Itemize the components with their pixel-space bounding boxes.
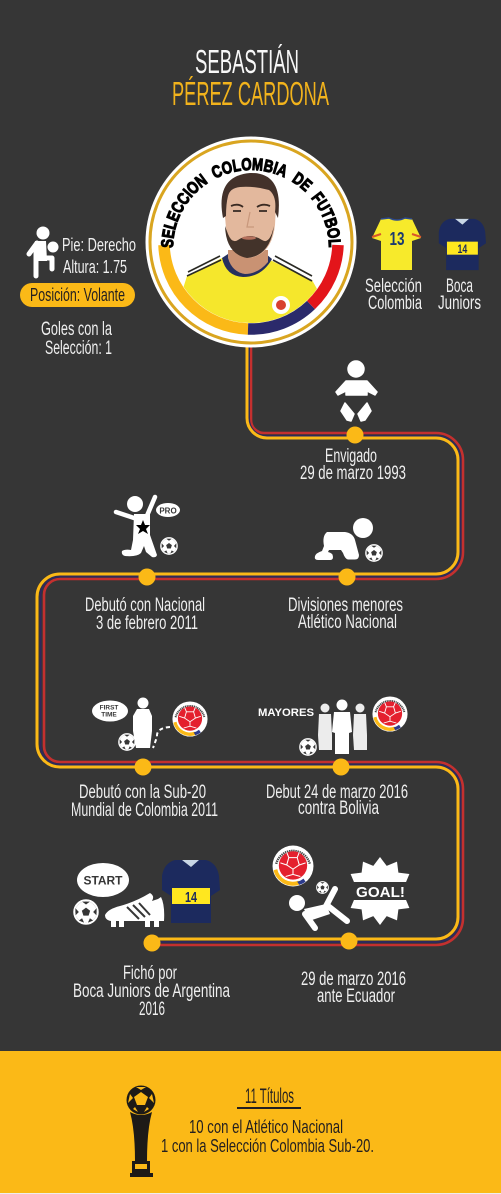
milestone: Sub-20 debut: Debutó con la Sub-20 [79, 782, 206, 803]
milestone: youth divisions [288, 518, 403, 633]
milestone: goal [273, 846, 420, 1007]
icon: bicycle kick goal [273, 846, 420, 928]
icon: baby [336, 361, 377, 421]
milestone: youth divisions: Divisiones menores [288, 595, 403, 616]
milestone: senior debut: Debut 24 de marzo 2016 [266, 782, 408, 803]
icon: mayores team [258, 696, 408, 755]
player stats: Goles con la [41, 319, 112, 340]
player stats [20, 226, 136, 359]
milestone: Boca transfer: Fichó por [123, 963, 177, 984]
title: PÉREZ CARDONA [172, 75, 329, 112]
milestone: senior debut [258, 696, 408, 819]
icon: first time [92, 698, 208, 750]
milestone: Nacional debut: 3 de febrero 2011 [96, 613, 198, 634]
icon: crawling baby [315, 518, 382, 561]
icon: Boca shirt [439, 219, 486, 270]
panel: titles: 11 Títulos [245, 1085, 294, 1108]
milestone: Nacional debut: Debutó con Nacional [85, 595, 205, 616]
milestone: Boca transfer: Boca Juniors de Argentina [73, 981, 230, 1002]
milestone: birth: 29 de marzo 1993 [300, 463, 406, 484]
milestone: Boca transfer: 2016 [139, 999, 165, 1020]
shirts [365, 218, 486, 314]
milestone: birth: Envigado [325, 446, 377, 467]
segmented ring [164, 245, 338, 329]
milestone: senior debut: contra Bolivia [298, 798, 379, 819]
icon: bicycle kick goal: GOAL! [356, 884, 405, 901]
curved heading: SELECCION COLOMBIA DE FUTBOL [160, 158, 341, 248]
milestone: goal: ante Ecuador [317, 986, 395, 1007]
shirts: Juniors [438, 293, 481, 314]
icon: pro player: PRO [159, 506, 177, 516]
panel: titles: 10 con el Atlético Nacional [189, 1117, 343, 1137]
milestone: Boca transfer [73, 860, 230, 1020]
milestone: goal: 29 de marzo 2016 [301, 969, 406, 990]
icon: Colombia shirt: 13 [390, 229, 404, 249]
title: SEBASTIÁN [195, 43, 299, 80]
shirts: Selección [365, 276, 422, 297]
icon: trophy [126, 1086, 156, 1177]
player stats: Selección: 1 [45, 338, 112, 359]
icon: first time: FIRST [100, 704, 118, 712]
portrait medallion [146, 136, 356, 348]
panel: titles [0, 1051, 501, 1194]
player stats: Altura: 1.75 [63, 257, 127, 277]
milestone: youth divisions: Atlético Nacional [298, 612, 397, 633]
milestone: Sub-20 debut: Mundial de Colombia 2011 [71, 800, 218, 821]
shirts: Colombia [368, 293, 422, 314]
timeline path [37, 345, 463, 945]
milestone: birth [300, 361, 406, 484]
icon: start boot and shirt: START [84, 876, 122, 888]
panel: titles: 1 con la Selección Colombia Sub-20. [161, 1136, 374, 1156]
icon: mayores team: MAYORES [258, 707, 314, 719]
player stats: Pie: Derecho [62, 235, 136, 255]
icon: player with ball [29, 226, 58, 276]
milestone: Nacional debut [85, 496, 205, 634]
shirts: Boca [446, 276, 473, 297]
icon: first time: TIME [101, 712, 117, 718]
icon: start boot and shirt [74, 860, 220, 927]
portrait photo [184, 173, 317, 323]
position pill: Posición: Volante [30, 285, 125, 305]
milestone: Sub-20 debut [71, 698, 218, 821]
title [172, 43, 329, 112]
